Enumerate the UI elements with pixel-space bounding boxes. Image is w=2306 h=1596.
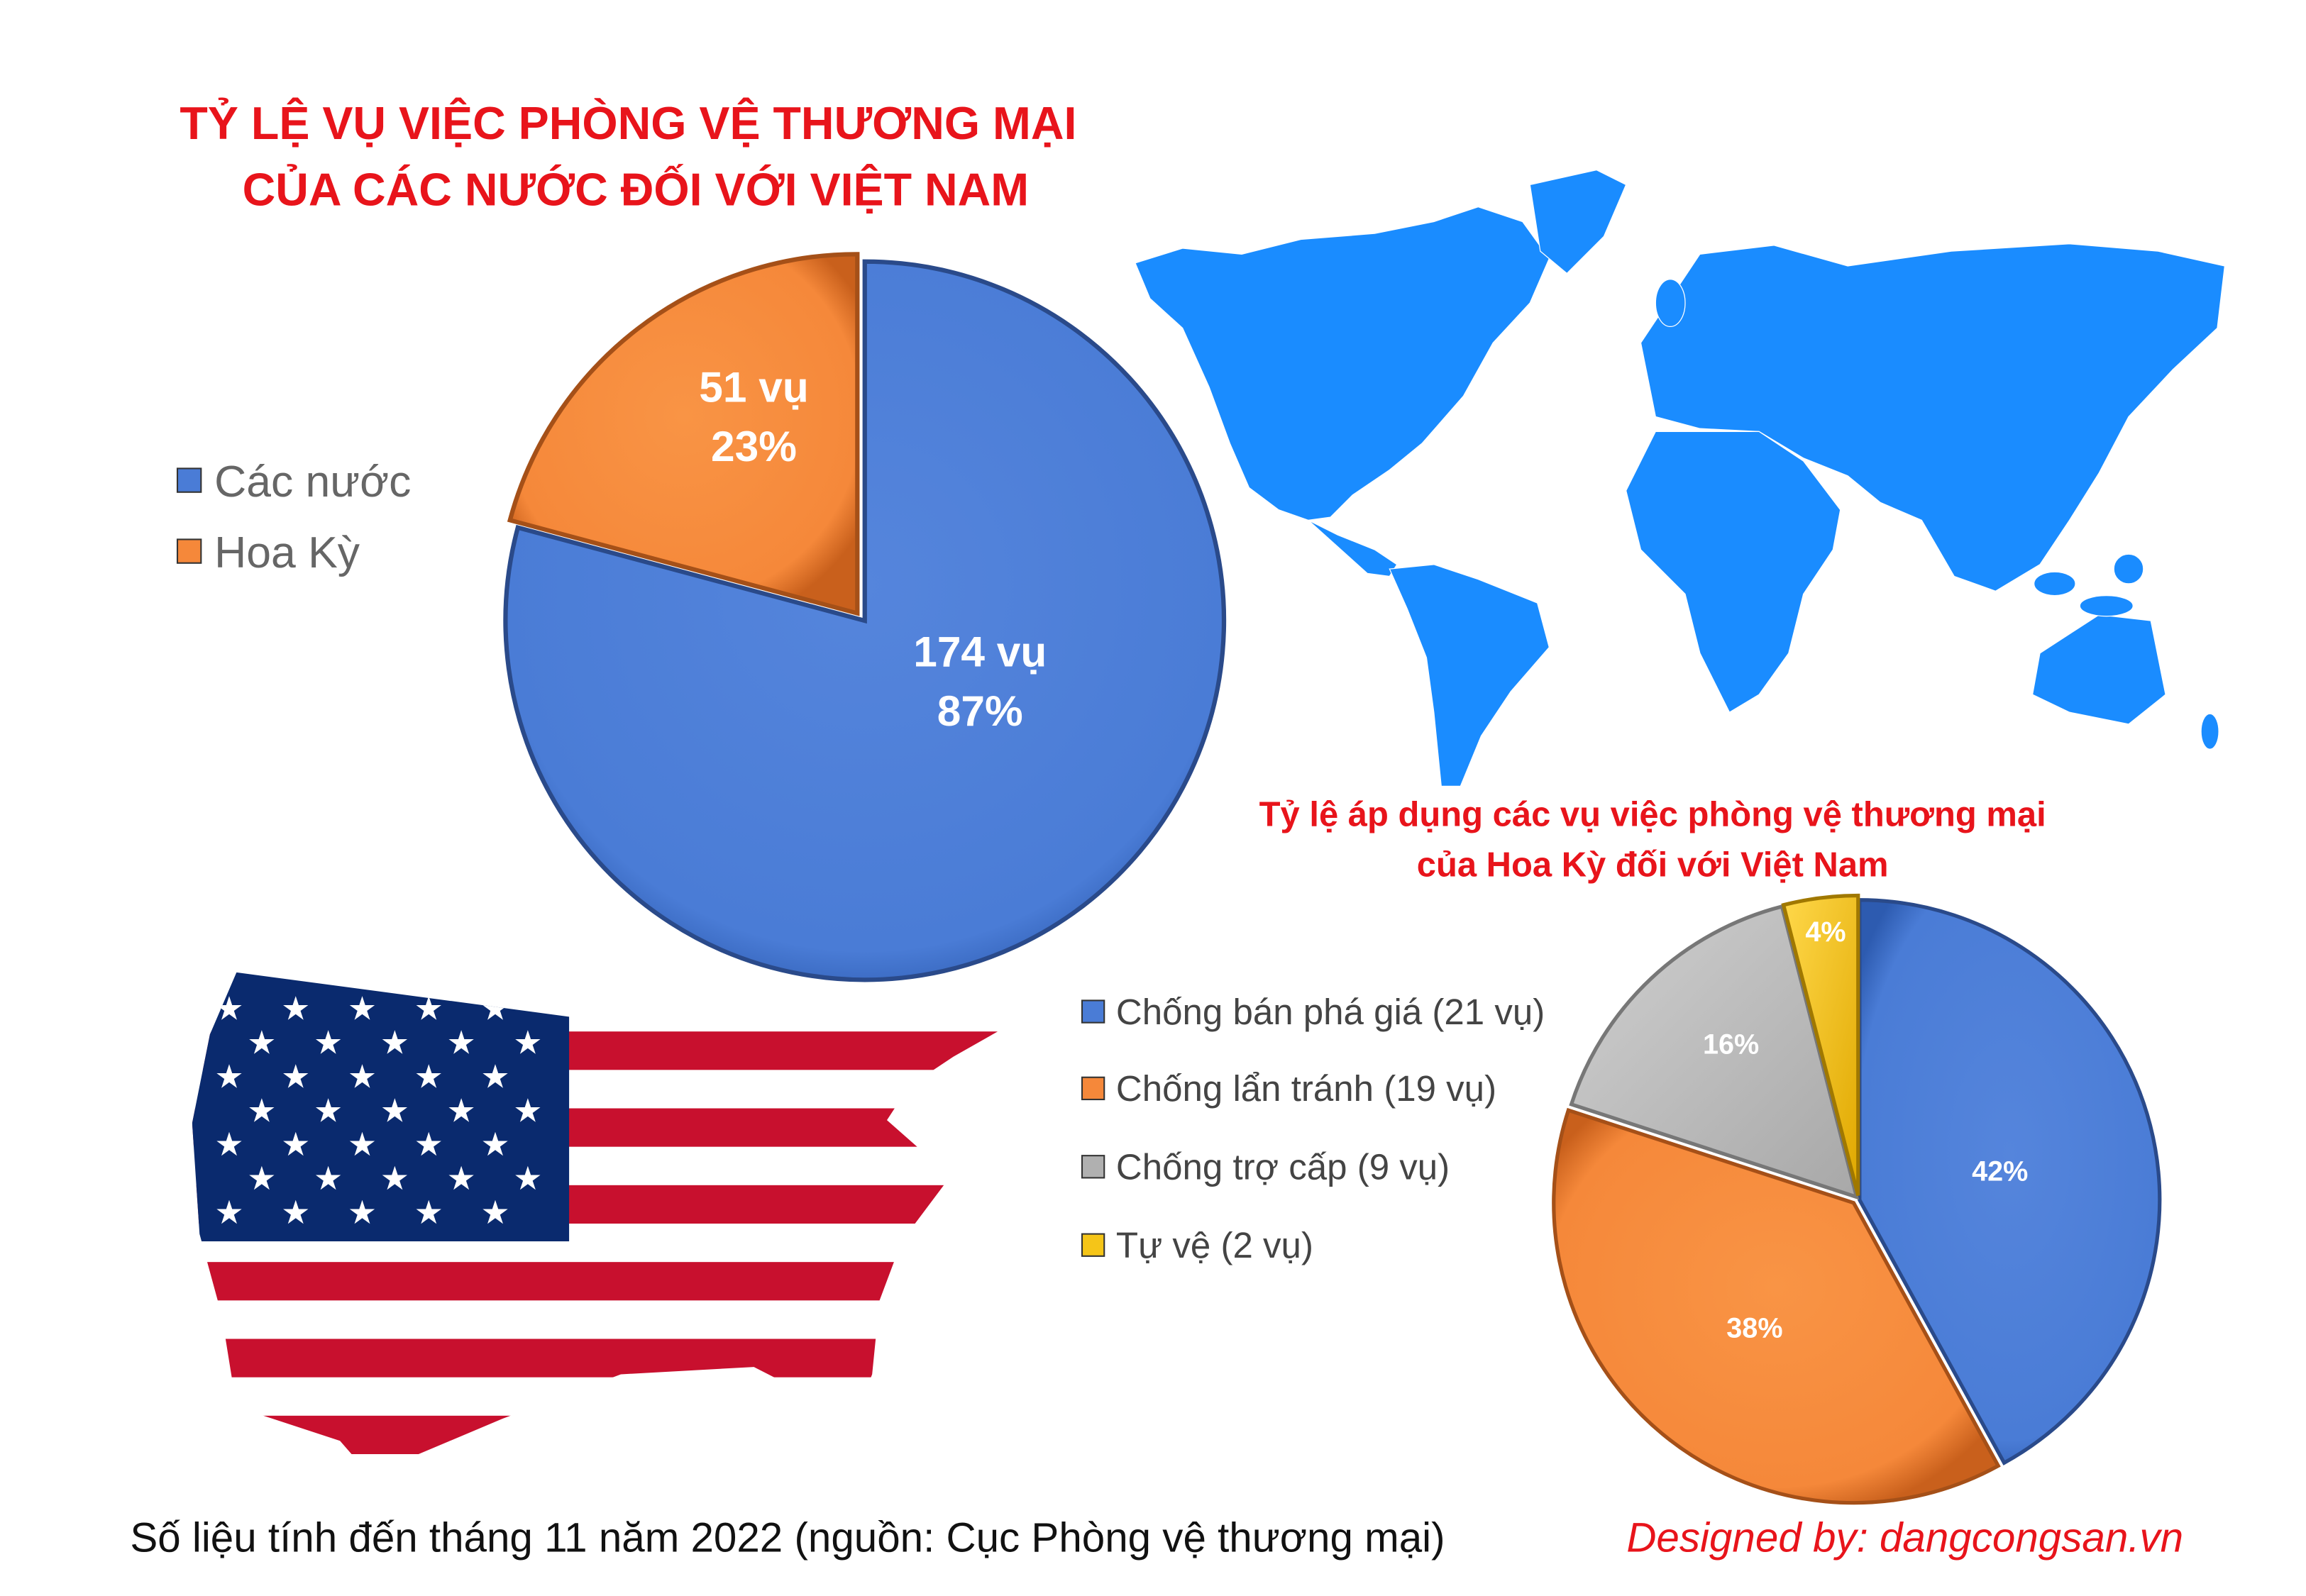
US flag map: ★: [446, 1092, 476, 1129]
US flag map: ★: [480, 1195, 509, 1231]
US flag map: ★: [247, 1024, 276, 1060]
US pie chart: 42%: [1972, 1156, 2028, 1187]
main pie chart: 174 vụ: [913, 628, 1047, 676]
legend: US pie: Tự vệ (2 vụ): [1116, 1225, 1313, 1265]
main pie chart: [505, 254, 1224, 980]
US flag map: ★: [380, 1092, 409, 1129]
legend: US pie: Chống trợ cấp (9 vụ): [1116, 1146, 1450, 1187]
legend: US pie: [1082, 992, 1545, 1265]
subtitle: US cases: Tỷ lệ áp dụng các vụ việc phòng vệ thương mại: [1259, 796, 2046, 834]
US flag map: ★: [414, 1126, 443, 1163]
US pie chart: 38%: [1726, 1312, 1783, 1343]
US flag map: ★: [348, 1195, 377, 1231]
main pie chart: 23%: [711, 422, 797, 470]
world map: [1135, 170, 2224, 786]
US flag map: ★: [247, 1160, 276, 1197]
US flag map: ★: [214, 991, 243, 1027]
US flag map: ★: [414, 1195, 443, 1231]
US flag map: ★: [281, 1195, 310, 1231]
subtitle: US cases: của Hoa Kỳ đối với Việt Nam: [1417, 846, 1889, 884]
US flag map: [192, 972, 998, 1454]
US flag map: ★: [348, 1126, 377, 1163]
title: CỦA CÁC NƯỚC ĐỐI VỚI VIỆT NAM: [243, 164, 1029, 216]
US pie chart: 16%: [1703, 1029, 1759, 1060]
US flag map: ★: [446, 1024, 476, 1060]
US flag map: ★: [281, 1058, 310, 1095]
footer: credit: Designed by: dangcongsan.vn: [1626, 1515, 2183, 1561]
legend: US pie: Chống lẩn tránh (19 vụ): [1116, 1068, 1496, 1109]
US flag map: ★: [380, 1160, 409, 1197]
US flag map: ★: [414, 1058, 443, 1095]
US flag map: ★: [513, 1160, 542, 1197]
US flag map: ★: [513, 1024, 542, 1060]
legend: main pie: Các nước: [214, 457, 411, 506]
US flag map: ★: [513, 1092, 542, 1129]
US flag map: ★: [314, 1160, 343, 1197]
US pie chart: [1554, 895, 2160, 1503]
US flag map: ★: [348, 991, 377, 1027]
footer: source: Số liệu tính đến tháng 11 năm 2022 (nguồn: Cục Phòng vệ thương mại): [130, 1515, 1445, 1561]
US flag map: ★: [348, 1058, 377, 1095]
US flag map: ★: [414, 991, 443, 1027]
main pie chart: 87%: [937, 687, 1023, 735]
title: [180, 97, 1076, 216]
US flag map: ★: [314, 1024, 343, 1060]
US flag map: ★: [281, 1126, 310, 1163]
US flag map: ★: [214, 1195, 243, 1231]
US pie chart: 4%: [1805, 916, 1846, 948]
US flag map: ★: [314, 1092, 343, 1129]
US flag map: ★: [247, 1092, 276, 1129]
US flag map: ★: [214, 1058, 243, 1095]
US flag map: ★: [480, 1058, 509, 1095]
US flag map: ★: [214, 1126, 243, 1163]
legend: main pie: Hoa Kỳ: [214, 528, 360, 577]
title: TỶ LỆ VỤ VIỆC PHÒNG VỆ THƯƠNG MẠI: [180, 97, 1076, 149]
main pie chart: 51 vụ: [699, 363, 809, 411]
US flag map: ★: [480, 991, 509, 1027]
legend: US pie: Chống bán phá giá (21 vụ): [1116, 992, 1545, 1032]
legend: main pie: [177, 457, 411, 577]
US flag map: ★: [446, 1160, 476, 1197]
subtitle: US cases: [1259, 796, 2046, 884]
US flag map: ★: [281, 991, 310, 1027]
US flag map: ★: [480, 1126, 509, 1163]
US flag map: ★: [380, 1024, 409, 1060]
